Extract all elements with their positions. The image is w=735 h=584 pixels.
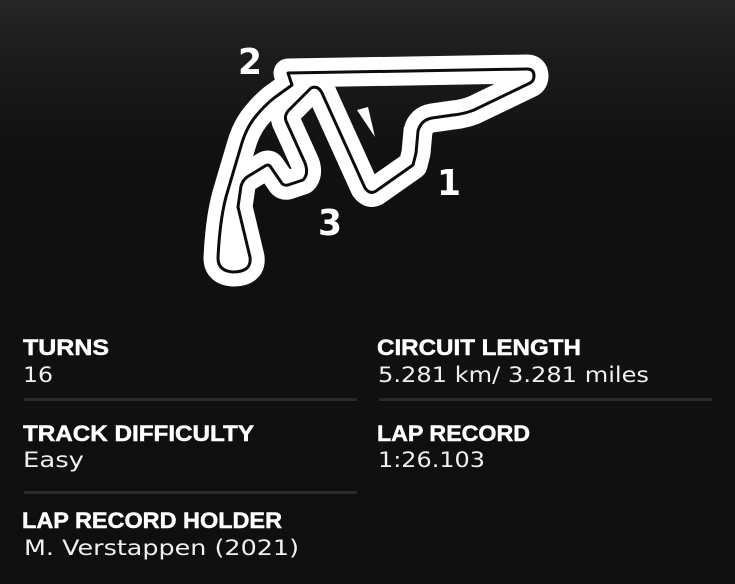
stat: circuit length: 5.281 km/ 3.281 miles <box>378 363 649 388</box>
infield white triangle <box>357 107 375 137</box>
lobe white fill <box>222 205 248 270</box>
stat: lap record holder: LAP RECORD HOLDER <box>22 508 282 533</box>
sector number 1: 1 <box>437 163 461 204</box>
sector number 3: 3 <box>318 203 342 244</box>
stat: lap record holder: M. Verstappen (2021) <box>24 536 299 561</box>
stat: lap record: 1:26.103 <box>378 448 485 473</box>
track centre line <box>218 69 534 272</box>
stat: turns: TURNS <box>23 335 109 360</box>
stat: track difficulty <box>23 421 254 473</box>
track outer white band <box>218 69 534 272</box>
stat: lap record holder <box>22 508 299 561</box>
stat: lap record: LAP RECORD <box>377 421 530 446</box>
stat: circuit length <box>377 335 649 388</box>
stat: circuit length: CIRCUIT LENGTH <box>377 335 581 360</box>
sector number 2: 2 <box>238 42 262 83</box>
stat: turns <box>23 335 109 388</box>
stat: turns: 16 <box>23 363 53 388</box>
stat: lap record <box>377 421 530 473</box>
stat: track difficulty: Easy <box>23 448 84 473</box>
circuit map <box>218 42 534 272</box>
stat: track difficulty: TRACK DIFFICULTY <box>23 421 254 446</box>
